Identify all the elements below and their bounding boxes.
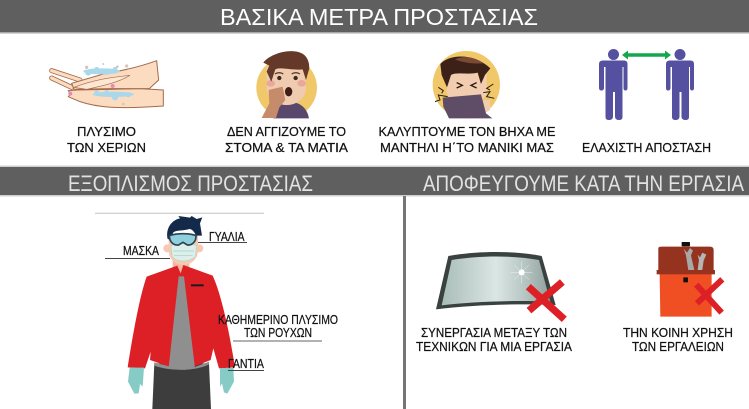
panel: cooperation on one job [416, 252, 573, 354]
heading: protective equipment: ΕΞΟΠΛΙΣΜΟΣ ΠΡΟΣΤΑΣΙΑΣ [68, 171, 313, 196]
goggles [169, 234, 196, 245]
label: hand washing: ΠΛΥΣΙΜΟ [77, 125, 136, 139]
mask [171, 243, 197, 261]
jacket [128, 265, 235, 368]
label: shared tools: ΤΩΝ ΕΡΓΑΛΕΙΩΝ [632, 340, 724, 354]
icon: boy touching mouth [256, 51, 317, 118]
label: cooperation: ΤΕΧΝΙΚΩΝ ΓΙΑ ΜΙΑ ΕΡΓΑΣΙΑ [416, 340, 573, 354]
label: cover cough: ΚΑΛΥΠΤΟΥΜΕ ΤΟΝ ΒΗΧΑ ΜΕ [378, 125, 556, 139]
logo [191, 284, 204, 286]
panel: cover cough [378, 51, 556, 155]
label: cooperation [416, 326, 573, 354]
title bar [0, 0, 749, 34]
label: cover cough [378, 125, 556, 155]
panel: protective equipment figure [95, 213, 338, 409]
icon: windshield with red X [436, 252, 564, 319]
label: goggles: ΓΥΑΛΙΑ [209, 230, 245, 244]
hair [167, 216, 202, 240]
label: cooperation: ΣΥΝΕΡΓΑΣΙΑ ΜΕΤΑΞΥ ΤΩΝ [421, 326, 567, 340]
label: hand washing [67, 125, 146, 155]
label: daily washing of clothes [218, 313, 338, 341]
neck [173, 258, 189, 276]
panel: hand washing [52, 61, 163, 155]
arrow: double-headed green [622, 50, 671, 60]
shirt [169, 276, 195, 370]
label: do not touch face: ΣΤΟΜΑ & ΤΑ ΜΑΤΙΑ [225, 141, 349, 155]
section bar [0, 166, 749, 196]
label: cover cough: ΜΑΝΤΗΛΙ Η΄ΤΟ ΜΑΝΙΚΙ ΜΑΣ [380, 141, 554, 155]
label: do not touch face [225, 125, 349, 155]
panel: minimum distance [582, 49, 711, 155]
gloves [128, 368, 144, 394]
label: minimum distance: ΕΛΑΧΙΣΤΗ ΑΠΟΣΤΑΣΗ [582, 141, 711, 155]
icon: toolbox with red X [657, 242, 722, 317]
figure: man with mask, goggles, gloves [128, 216, 235, 409]
label: gloves: ΓΑΝΤΙΑ [228, 357, 265, 371]
label: hand washing: ΤΩΝ ΧΕΡΙΩΝ [67, 141, 146, 155]
title bar: ΒΑΣΙΚΑ ΜΕΤΡΑ ΠΡΟΣΤΑΣΙΑΣ [220, 4, 538, 30]
label: shared tools [623, 326, 733, 354]
icon: boy coughing into sleeve [433, 51, 500, 118]
head [169, 235, 198, 265]
label: daily washing of clothes: ΤΩΝ ΡΟΥΧΩΝ [244, 326, 312, 340]
panel: shared tools [623, 242, 733, 354]
label: mask [105, 244, 170, 258]
panel: do not touch face [225, 51, 349, 155]
icon: two people [599, 49, 694, 120]
label: shared tools: ΤΗΝ ΚΟΙΝΗ ΧΡΗΣΗ [623, 326, 733, 340]
label: do not touch face: ΔΕΝ ΑΓΓΙΖΟΥΜΕ ΤΟ [227, 125, 346, 139]
icon: washing hands [52, 61, 163, 108]
label: mask: ΜΑΣΚΑ [123, 244, 160, 258]
label: daily washing of clothes: ΚΑΘΗΜΕΡΙΝΟ ΠΛΥΣΙΜΟ [218, 313, 338, 327]
pants [152, 363, 211, 409]
